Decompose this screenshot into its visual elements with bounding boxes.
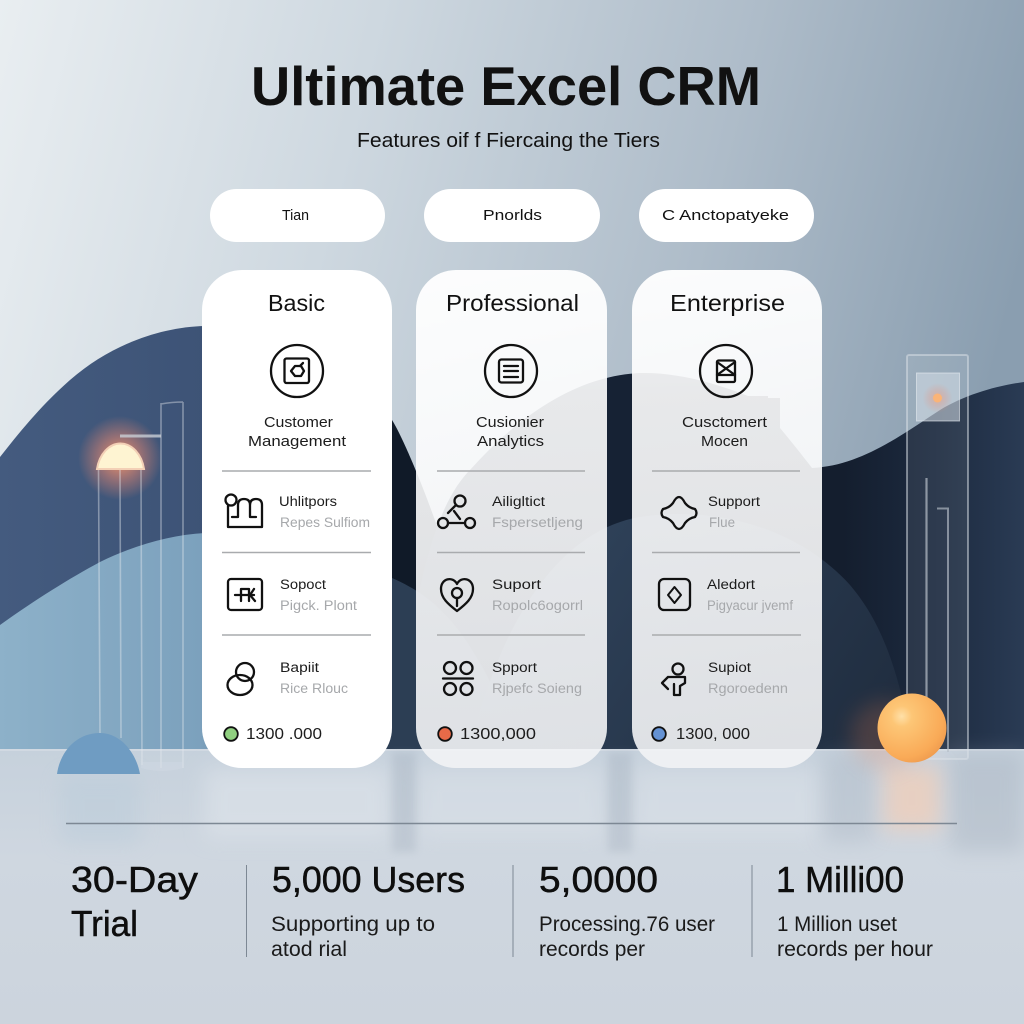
stat: 1 Milli00: records per hour: [777, 938, 933, 961]
title: Ultimate Excel CRM: [251, 55, 761, 117]
subtitle: Features oif f Fiercaing the Tiers: [357, 130, 660, 152]
panel: Professional tier: [416, 270, 607, 768]
price row: [438, 726, 536, 743]
row 2 text: Pigyacur jvemf: [707, 598, 793, 613]
pill: Pnorlds: [424, 189, 600, 242]
icon: row 1 star: [662, 497, 696, 529]
icon: row 2 badge: [659, 579, 690, 610]
feature name: Cusionier: [476, 414, 544, 431]
panel: Enterprise tier: [632, 270, 822, 768]
row 3 text: Spport: [492, 660, 537, 675]
row 2 text: Ropolc6ogorrl: [492, 598, 583, 613]
row 1 text: Flue: [709, 515, 735, 530]
row 3 text: Rjpefc Soieng: [492, 681, 582, 696]
price row: 1300,000: [460, 726, 536, 743]
row 2 text: Suport: [492, 577, 541, 592]
stat: 5,0000: [539, 859, 715, 961]
row 2 text: [492, 577, 583, 613]
icon: row 3 circles: [443, 662, 473, 695]
lamp sculpture left: [57, 402, 183, 774]
icon: row 2 plan: [228, 579, 262, 610]
feature name: Analytics: [477, 433, 544, 450]
row 3 text: Rgoroedenn: [708, 681, 788, 696]
row 2 text: [280, 577, 357, 613]
feature name: [682, 414, 768, 450]
stat: 30-Day Trial: Trial: [71, 903, 138, 944]
row 3 text: Rice Rlouc: [280, 681, 348, 696]
icon: row 1 nodes: [438, 496, 475, 528]
mid blue hump lower: [470, 514, 912, 750]
stat: 5,0000: records per: [539, 938, 645, 961]
stat: 30-Day Trial: 30-Day: [71, 859, 198, 900]
stat: 5,0000: Processing.76 user: [539, 913, 715, 936]
stat: 5,000 Users: atod rial: [271, 938, 347, 961]
row 3 text: Bapiit: [280, 660, 319, 675]
row 3 text: [708, 660, 788, 696]
panel: Basic tier: [202, 270, 392, 768]
pill: Pnorlds: Pnorlds: [483, 207, 542, 224]
icon: customer management: [271, 345, 323, 397]
row 1 text: [279, 494, 370, 530]
feature name: Mocen: [701, 433, 748, 450]
pill: Tian: [210, 189, 385, 242]
feature name: Cusctomert: [682, 414, 768, 431]
stat: 5,000 Users: Supporting up to: [271, 913, 435, 936]
row 1 text: [492, 494, 583, 530]
stat: 1 Milli00: 1 Milli00: [776, 859, 904, 900]
stat: 1 Milli00: 1 Million uset: [777, 913, 897, 936]
pill: C Anctopatyeke: [639, 189, 814, 242]
stat: 5,0000: 5,0000: [539, 859, 658, 900]
icon: row 1 users: [226, 494, 262, 527]
stat: 1 Milli00: [776, 859, 933, 961]
feature name: Management: [248, 433, 347, 450]
row 2 text: Pigck. Plont: [280, 598, 357, 613]
feature name: [248, 414, 347, 450]
pill: C Anctopatyeke: C Anctopatyeke: [662, 207, 789, 224]
icon: row 3 person: [662, 664, 685, 695]
row 3 text: [280, 660, 348, 696]
glass tube with orange ball right: [851, 355, 968, 769]
stat: 5,000 Users: [271, 859, 465, 961]
row 1 text: [708, 494, 760, 530]
row 3 text: [492, 660, 582, 696]
dark navy wave left: [0, 326, 500, 750]
dark navy hump centre and right: [416, 373, 1024, 750]
heading: Professional: Professional: [446, 290, 579, 316]
row 3 text: Supiot: [708, 660, 751, 675]
row 2 text: [707, 577, 793, 613]
row 1 text: Uhlitpors: [279, 494, 337, 509]
row 1 text: Repes Sulfiom: [280, 515, 370, 530]
icon: row 2 heart: [441, 579, 473, 611]
icon: row 3 rings: [228, 663, 254, 695]
feature name: [476, 414, 544, 450]
floor: [0, 749, 1024, 1024]
price row: 1300, 000: [676, 726, 750, 743]
row 1 text: Support: [708, 494, 760, 509]
stat: 30-Day Trial: [71, 859, 198, 944]
light blue wave left: [0, 533, 520, 750]
row 2 text: Sopoct: [280, 577, 326, 592]
price row: 1300 .000: [246, 726, 322, 743]
row 2 text: Aledort: [707, 577, 755, 592]
pill: Tian: Tian: [282, 207, 309, 224]
stat: 5,000 Users: 5,000 Users: [272, 859, 465, 900]
feature name: Customer: [264, 414, 333, 431]
heading: Enterprise: Enterprise: [670, 290, 785, 316]
row 1 text: Fspersetljeng: [492, 515, 583, 530]
icon: customer analytics: [485, 345, 537, 397]
icon: customer model: [700, 345, 752, 397]
row 1 text: Ailigltict: [492, 494, 545, 509]
heading: Basic: Basic: [268, 290, 325, 316]
